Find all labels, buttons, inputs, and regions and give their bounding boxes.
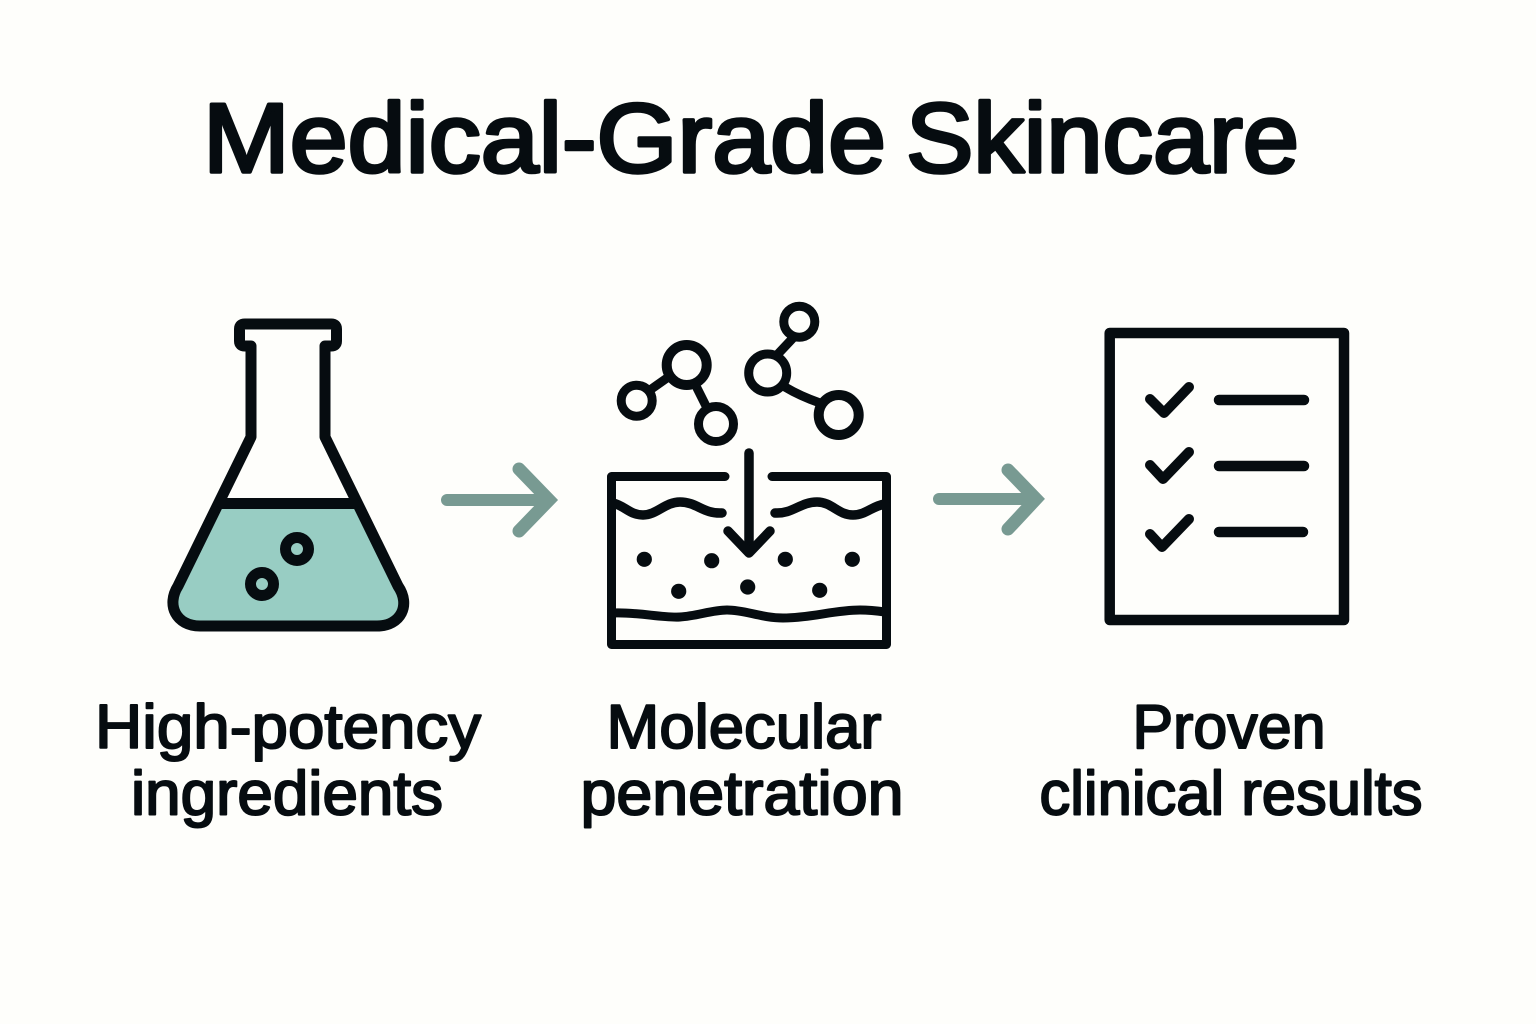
icon: flask with liquid xyxy=(173,324,404,626)
label: proven clinical results xyxy=(1040,693,1422,828)
left molecule xyxy=(621,345,734,442)
title xyxy=(203,83,1299,193)
arrow: first xyxy=(447,469,549,531)
icon: molecules penetrating skin xyxy=(612,306,886,644)
right molecule xyxy=(749,306,859,435)
label: high-potency ingredients: ingredients xyxy=(131,760,443,828)
label: molecular penetration: penetration xyxy=(580,760,904,828)
title: Medical-Grade xyxy=(203,83,886,193)
label: proven clinical results: Proven xyxy=(1132,693,1326,762)
down arrow xyxy=(728,453,770,553)
label: molecular penetration xyxy=(580,693,904,828)
icon: clinical checklist xyxy=(1110,333,1344,620)
arrow: second xyxy=(939,470,1036,529)
label: high-potency ingredients: High-potency xyxy=(95,693,481,762)
skin block xyxy=(612,476,886,644)
label: high-potency ingredients xyxy=(95,693,481,828)
label: proven clinical results: clinical results xyxy=(1040,760,1422,828)
dots xyxy=(637,552,860,599)
label: molecular penetration: Molecular xyxy=(606,693,882,762)
title: Skincare xyxy=(906,83,1299,193)
